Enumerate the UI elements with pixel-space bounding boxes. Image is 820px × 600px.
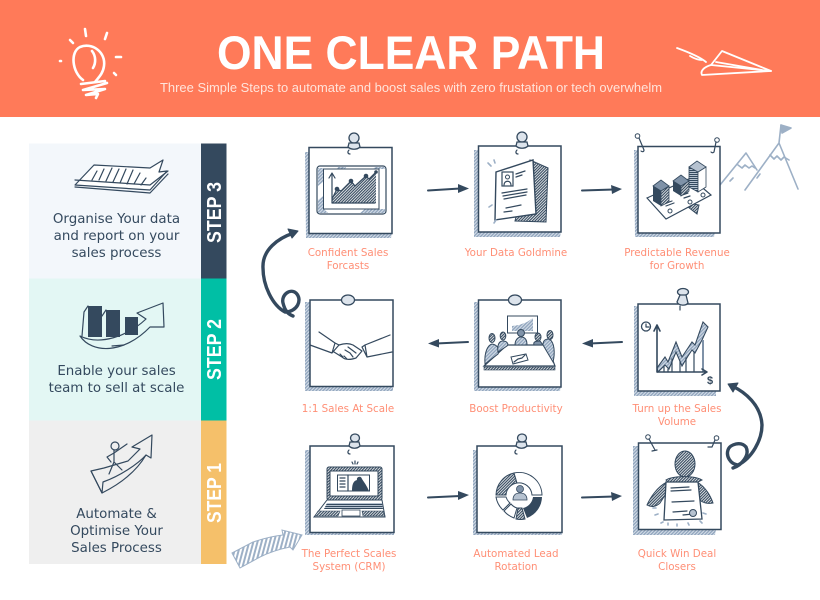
step 1 text: Optimise Your <box>70 524 163 539</box>
step 2 text <box>49 364 184 396</box>
icon: tablet with chart <box>317 166 386 214</box>
arrow: hatched arrow into first step <box>232 530 302 568</box>
pin <box>677 288 688 310</box>
step 3 text: sales process <box>72 246 161 261</box>
label <box>308 247 388 272</box>
pin <box>508 295 522 305</box>
icon: light bulb <box>60 29 121 98</box>
arrow: curved loop up to step 3 <box>263 229 299 316</box>
icon: document <box>488 160 548 223</box>
card: Predictable Revenue for Growth <box>624 134 730 272</box>
step 2 text: team to sell at scale <box>49 381 184 396</box>
card: Turn up the Sales Volume <box>631 288 722 428</box>
card: Confident Sales Forcasts <box>305 133 392 272</box>
pin <box>516 132 528 154</box>
arrow: left 1 <box>428 339 468 348</box>
pin <box>342 295 354 305</box>
step 1 text: Sales Process <box>71 541 162 556</box>
subtitle: Three Simple Steps to automate and boost sales with zero frustation or tech overwhelm <box>160 81 662 95</box>
icon: person holding contract <box>647 451 713 526</box>
label: Predictable Revenue <box>624 247 730 259</box>
mountains <box>720 125 798 190</box>
card: 1:1 Sales At Scale <box>302 295 394 415</box>
label: Confident Sales <box>308 247 388 259</box>
label: Quick Win Deal <box>638 548 716 560</box>
label: Closers <box>658 561 696 573</box>
arrow: right 2 <box>582 185 622 194</box>
card: Your Data Goldmine <box>464 132 567 259</box>
pin <box>348 434 360 454</box>
icon: rising chart with clock and dollar: $ <box>707 375 713 387</box>
label: System (CRM) <box>313 561 385 573</box>
pin <box>348 133 360 154</box>
step 1 bar <box>201 420 226 564</box>
label <box>624 247 730 272</box>
header banner <box>0 0 820 117</box>
step 3 text <box>53 212 180 261</box>
step 1 text: Automate & <box>76 507 157 522</box>
card: The Perfect Scales System (CRM) <box>301 434 396 573</box>
step 3 text: Organise Your data <box>53 212 180 227</box>
label <box>638 548 716 573</box>
icon: donut chart with person <box>496 472 542 519</box>
pins <box>635 134 719 153</box>
step 3 bar <box>201 144 226 278</box>
icon: meeting room <box>484 316 555 370</box>
icon: handshake <box>310 332 392 359</box>
label <box>631 403 722 428</box>
label: for Growth <box>650 260 704 272</box>
label: Boost Productivity <box>469 403 563 415</box>
step 3 text: and report on your <box>54 229 180 244</box>
panel: step 2 <box>29 278 226 420</box>
panel: step 1 <box>29 420 226 564</box>
step 2 label: STEP 2 <box>204 319 226 380</box>
step 3 label: STEP 3 <box>204 182 226 243</box>
step 2 bar <box>201 278 226 420</box>
label: Your Data Goldmine <box>464 247 567 259</box>
label: Forcasts <box>327 260 369 272</box>
arrow: right 4 <box>582 492 622 501</box>
step 1 label: STEP 1 <box>204 463 226 523</box>
icon: bars and arrow <box>80 303 164 349</box>
icon: figure climbing arrow <box>91 435 152 493</box>
step 2 text: Enable your sales <box>57 364 176 379</box>
arrow: curved loop up to turn up the sales volume <box>727 383 762 468</box>
panel: step 3 <box>29 144 226 278</box>
icon: stack of papers <box>75 160 168 193</box>
card: Boost Productivity <box>469 295 563 415</box>
icon: isometric bar chart <box>647 161 711 219</box>
card: Quick Win Deal Closers <box>633 435 721 573</box>
label <box>301 548 396 573</box>
icon: paper plane <box>677 48 771 75</box>
arrow: left 2 <box>582 339 622 348</box>
label: 1:1 Sales At Scale <box>302 403 394 415</box>
card: Automated Lead Rotation <box>473 434 562 573</box>
arrow: right 3 <box>428 491 469 500</box>
label: Automated Lead <box>473 548 559 560</box>
pin <box>515 434 527 454</box>
label: Rotation <box>494 561 538 573</box>
label: The Perfect Scales <box>301 548 396 560</box>
icon: laptop <box>314 461 385 517</box>
label: Turn up the Sales <box>631 403 722 415</box>
step 1 text <box>70 507 163 556</box>
title: ONE CLEAR PATH <box>217 26 605 79</box>
arrow: right 1 <box>428 184 469 193</box>
label <box>473 548 559 573</box>
label: Volume <box>658 416 696 428</box>
pins <box>646 435 719 451</box>
